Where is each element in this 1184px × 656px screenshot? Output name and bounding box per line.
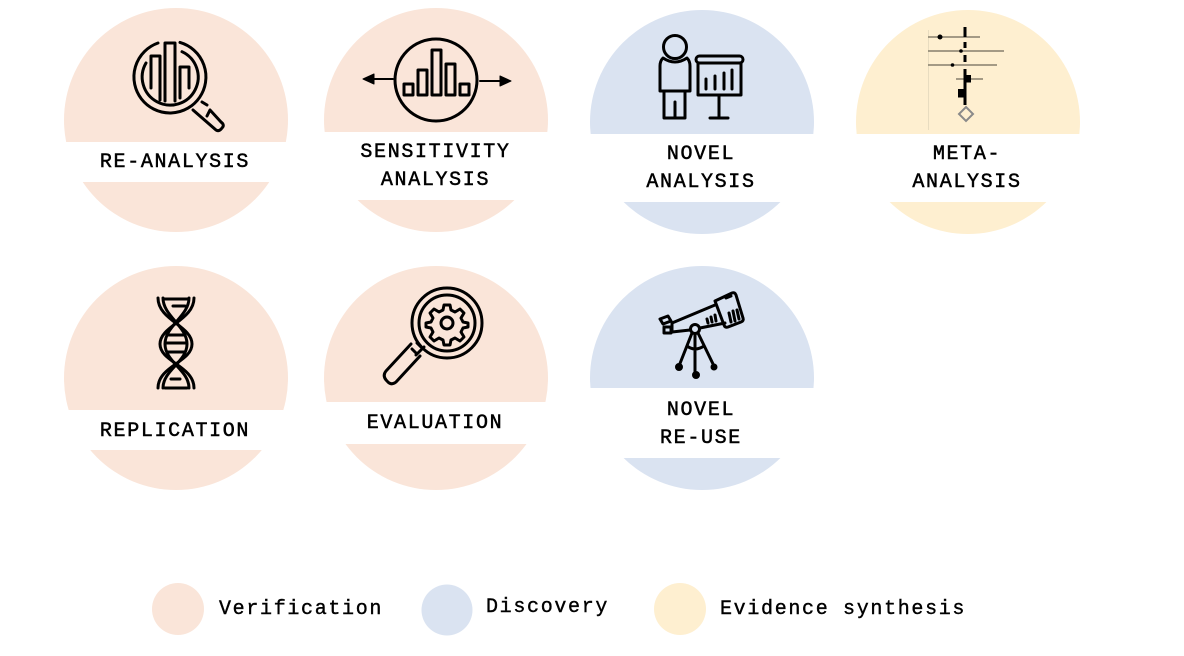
label: NOVEL (667, 143, 735, 166)
panel: replication (60, 266, 292, 490)
label: EVALUATION (367, 412, 503, 435)
icon: forest plot (928, 27, 1004, 130)
panel: novel analysis (586, 10, 818, 234)
label: RE-ANALYSIS (100, 151, 250, 174)
label: REPLICATION (100, 420, 250, 443)
label: ANALYSIS (381, 169, 490, 192)
icon: presenter with chart board (660, 36, 743, 118)
icon: bar chart in circle with arrows (363, 39, 511, 121)
label: ANALYSIS (912, 171, 1022, 194)
panel: meta-analysis (852, 10, 1084, 234)
label: ANALYSIS (646, 171, 756, 194)
legend: verification (152, 583, 383, 635)
label: NOVEL (667, 399, 735, 422)
panel: novel re-use (586, 266, 818, 490)
icon: DNA helix (158, 298, 194, 388)
legend: evidence synthesis (654, 583, 966, 635)
label: SENSITIVITY (360, 141, 511, 164)
icon: magnifier over bar chart (134, 42, 223, 131)
legend: verification: Verification (219, 598, 383, 621)
label: META- (933, 143, 1001, 166)
legend: discovery (422, 584, 609, 636)
panel: evaluation (320, 266, 552, 490)
panel: sensitivity analysis (320, 8, 552, 232)
icon: magnifier with gear (384, 288, 482, 384)
label: RE-USE (660, 427, 742, 450)
legend: evidence synthesis: Evidence synthesis (720, 598, 966, 621)
legend: discovery: Discovery (486, 596, 609, 619)
panel: re-analysis (60, 8, 292, 232)
icon: telescope on tripod (660, 293, 743, 378)
